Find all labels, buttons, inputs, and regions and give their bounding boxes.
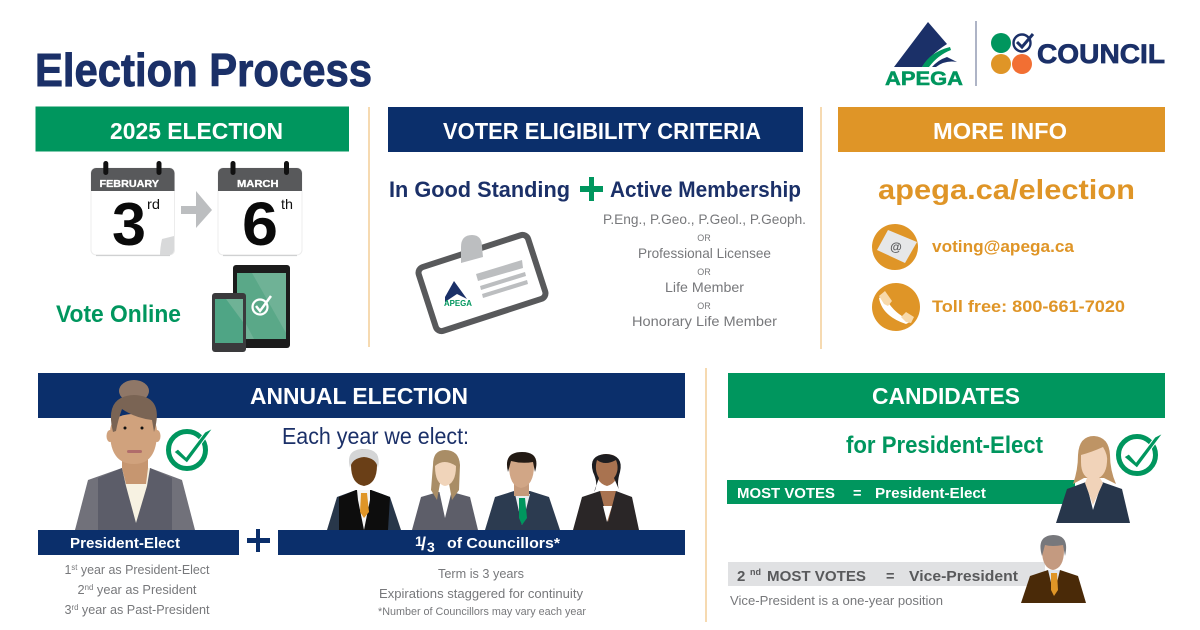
membership list: P.Eng., P.Geo., P.Geol., P.Geoph. [603,211,806,227]
president-elect bar: President-Elect [70,535,180,552]
header: candidates [728,373,1165,418]
membership list: OR [697,267,711,277]
logo: APEGA: APEGA [885,69,963,90]
person: president-elect [75,380,195,530]
plus [247,529,270,552]
councillor notes [378,566,586,618]
icon: tablet and phone [212,265,290,352]
icon: check [1118,433,1163,474]
email address: voting@apega.ca [932,237,1075,256]
header: voter eligibility: VOTER ELIGIBILITY CRITERIA [443,118,761,144]
president-elect bar [38,530,239,555]
calendar: March 6th: 6 [242,190,278,258]
calendar: February 3rd: FEBRUARY [100,179,159,190]
header: annual election: ANNUAL ELECTION [250,383,468,409]
panel: annual election [38,373,685,618]
second most votes bar: = [886,569,894,585]
logo: Council [991,33,1165,74]
in good standing: In Good Standing [389,177,570,202]
councillors bar: 3 [427,539,435,555]
icon: id badge [417,233,547,333]
icon: phone [872,283,920,331]
plus [580,177,603,201]
most votes bar [727,480,1075,504]
header: annual election [38,373,685,418]
arrow [181,191,212,228]
most votes bar: President-Elect [875,486,986,502]
header: more info: MORE INFO [933,118,1067,144]
logo: Council: COUNCIL [1037,39,1165,69]
second most votes bar: 2 [737,568,745,585]
calendar: March 6th: th [281,196,293,212]
councillor notes: Expirations staggered for continuity [379,586,583,601]
president-elect terms: st [71,563,78,572]
dividers [369,107,821,622]
header: candidates: CANDIDATES [872,383,1020,409]
icon: check [168,428,213,468]
president-elect terms: year as President [93,582,197,597]
calendar: February 3rd [91,161,174,258]
membership list [603,211,806,329]
membership list: Honorary Life Member [632,313,777,329]
most votes bar: = [853,486,861,502]
president-elect terms: rd [72,603,78,612]
membership list: OR [697,301,711,311]
second most votes bar: Vice-President [909,569,1018,585]
councillors bar: / [421,534,426,554]
membership list: Life Member [665,279,744,295]
president-elect terms: 2 [78,582,85,597]
president-elect terms: year as President-Elect [77,562,210,577]
panel: voter eligibility [388,107,806,333]
header: more info [838,107,1165,152]
membership list: OR [697,233,711,243]
councillors bar [278,530,685,555]
second most votes bar [728,562,1045,586]
panel: more info [838,107,1165,331]
header: voter eligibility [388,107,803,152]
president-elect terms: 1 [64,562,72,577]
panel: candidates [727,373,1165,608]
calendar: February 3rd: 3 [112,191,146,258]
icon: id badge: APEGA [444,299,472,308]
each year we elect: Each year we elect: [282,423,469,449]
icon: email: @ [890,240,902,254]
panel: 2025 election [36,106,349,352]
president-elect terms [64,562,210,617]
councillor notes: Term is 3 years [438,566,524,581]
second most votes bar: nd [750,567,761,577]
person: councillor 3 [485,452,560,530]
president-elect terms: nd [85,583,93,592]
president-elect terms: year as Past-President [78,602,210,617]
calendar: March 6th [218,161,302,258]
phone number: Toll free: 800-661-7020 [932,297,1125,316]
most votes bar: MOST VOTES [737,486,835,502]
person: vice-president [1021,535,1086,603]
for president-elect: for President-Elect [846,432,1043,459]
active membership: Active Membership [610,177,801,202]
header: 2025 election [36,106,349,152]
vote online: Vote Online [56,301,181,328]
icon: email [872,224,918,270]
header: 2025 election: 2025 ELECTION [110,118,283,144]
person: councillor 4 [573,454,639,530]
councillors bar: of Councillors* [447,535,560,552]
councillors bar: 1 [415,533,423,549]
second most votes bar: MOST VOTES [767,569,866,585]
logo: APEGA [885,22,963,90]
person: president-elect candidate [1056,436,1130,523]
membership list: Professional Licensee [638,245,771,261]
vice-president note: Vice-President is a one-year position [730,593,943,608]
calendar: February 3rd: rd [147,196,160,212]
website: apega.ca/election [878,174,1135,205]
calendar: March 6th: MARCH [237,179,278,190]
person: councillor 1 [327,449,401,530]
president-elect terms: 3 [64,602,72,617]
title: Election Process [35,44,372,96]
person: councillor 2 [412,450,478,530]
councillor notes: *Number of Councillors may vary each year [378,606,586,618]
